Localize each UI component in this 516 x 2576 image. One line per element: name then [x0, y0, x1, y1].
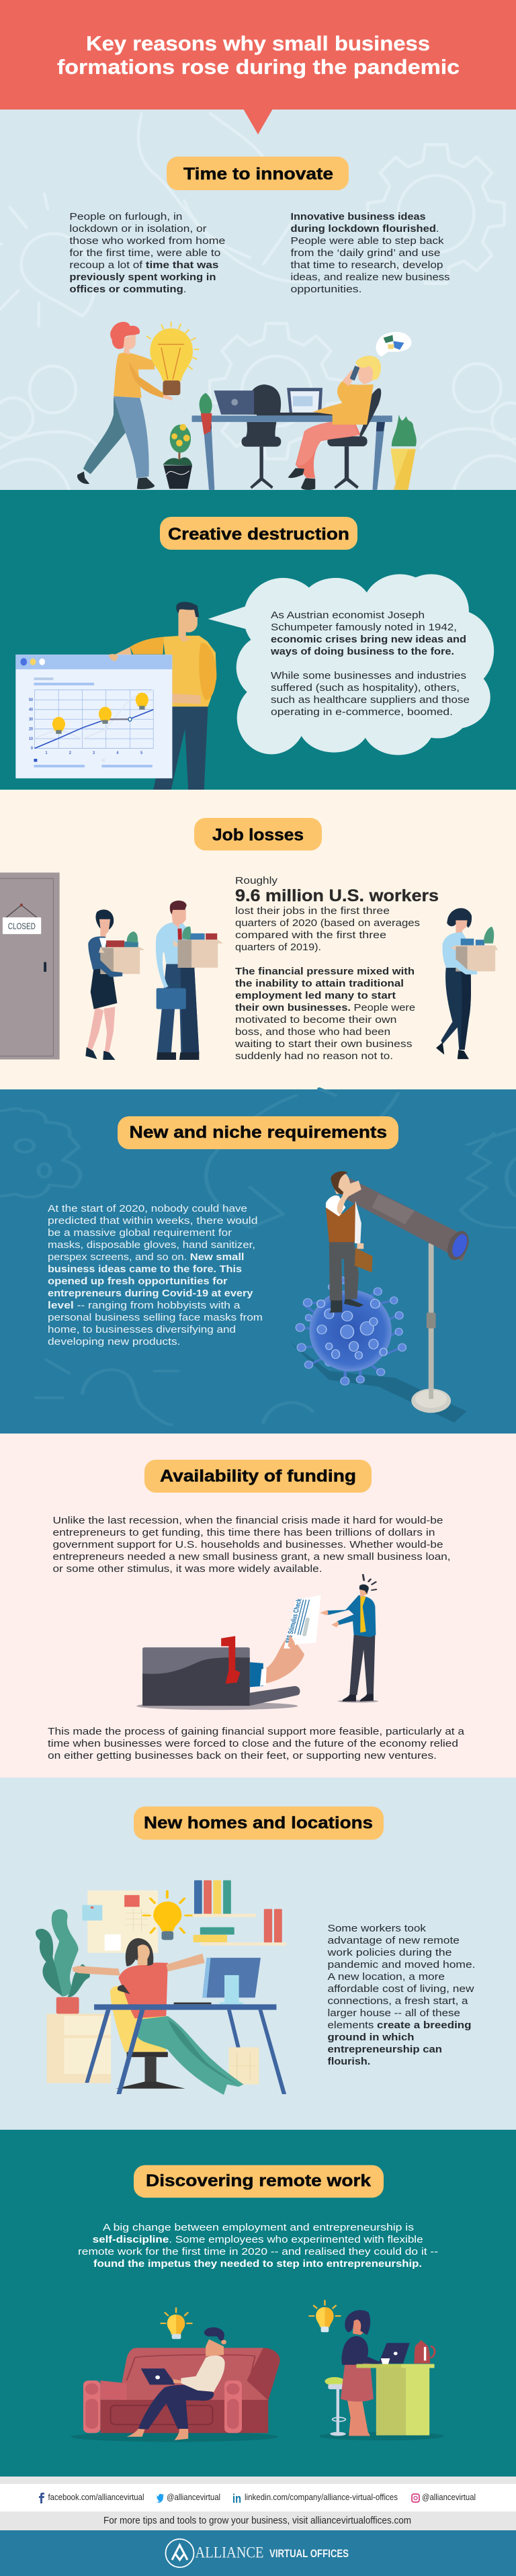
text block: job losses copy: motivated to become their own — [235, 1014, 396, 1026]
text block: job losses copy: quarters of 2019). — [235, 942, 321, 953]
text block: speech: Schumpeter famously noted in 1942, — [271, 622, 457, 633]
text block: speech: operating in e-commerce, boomed. — [271, 706, 453, 718]
text block: job losses copy: suddenly had no reason not to. — [235, 1050, 393, 1062]
text block: right column: that time to research, develop — [290, 259, 443, 271]
heading: availability of funding: Availability of funding — [160, 1466, 356, 1485]
heading: new homes and locations: New homes and locations — [144, 1814, 373, 1833]
text block: job losses copy: quarters of 2020 (based on averages — [235, 917, 420, 929]
chart board: line chart with lightbulbs: 50 — [29, 698, 33, 702]
text block: left column: offices or commuting . — [69, 284, 186, 295]
heading: discovering remote work — [134, 2165, 384, 2198]
text block: niche requirements: predicted that within weeks, there would — [48, 1215, 258, 1227]
heading: time to innovate — [167, 157, 349, 190]
text block: niche requirements: entrepreneurs during Covid-19 at every — [48, 1288, 253, 1299]
text block: left column: lockdown or in isolation, or — [69, 223, 206, 235]
illustration: man on sofa with laptop — [71, 2307, 280, 2442]
text block: speech: As Austrian economist Joseph — [271, 610, 425, 621]
text block: niche requirements: masks, disposable gloves, hand sanitizer, — [48, 1239, 255, 1251]
icon: twitter — [157, 2494, 164, 2503]
panel: time to innovate — [0, 109, 516, 490]
icon: instagram — [412, 2494, 419, 2502]
big stat: 9.6 million U.S. workers — [235, 886, 439, 905]
text block: right column — [290, 211, 450, 295]
text block: funding outcome: This made the process of gaining financial support more feasible, particularly at a — [48, 1726, 465, 1737]
text block: job losses copy: The financial pressure mixed with — [235, 966, 415, 977]
social links bar: facebook.com/alliancevirtual — [48, 2493, 144, 2502]
chart board: line chart with lightbulbs: 4 — [116, 751, 119, 755]
text block: new homes copy: Some workers took — [328, 1923, 427, 1934]
heading: time to innovate: Time to innovate — [183, 165, 333, 183]
illustration: woman at counter with laptop — [308, 2300, 444, 2440]
social links bar: @alliancevirtual — [422, 2493, 476, 2502]
text block: remote work: found the impetus they needed to step into entrepreneurship. — [93, 2258, 422, 2270]
text block: job losses copy: employment led many to start — [235, 990, 396, 1001]
illustration: mailbox with stimulus check — [136, 1575, 378, 1710]
illustration: woman walking with box — [436, 908, 498, 1059]
text block: niche requirements: personal business selling face masks from — [48, 1312, 263, 1323]
illustration: woman with box — [85, 909, 145, 1060]
illustration: mailbox with stimulus check: $$$ Stimulus Check — [284, 1597, 303, 1643]
text block: right column: during lockdown flourished . — [290, 223, 439, 235]
text block: remote work: self-discipline . Some employees who experimented with flexible — [93, 2234, 423, 2245]
panel: discovering remote work — [0, 2130, 516, 2477]
text block: new homes copy: larger house -- all of these — [328, 2007, 460, 2019]
chart board: line chart with lightbulbs — [16, 654, 172, 778]
title — [57, 32, 460, 79]
text block: funding outcome: time when businesses were forced to close and the future of the economy relied — [48, 1738, 458, 1749]
title: Key reasons why small business — [86, 32, 430, 55]
chart board: line chart with lightbulbs: 0 — [31, 747, 33, 751]
text block: niche requirements: level -- ranging from hobbyists with a — [48, 1300, 241, 1311]
title: formations rose during the pandemic — [57, 55, 460, 79]
icon: alliance logo — [165, 2539, 194, 2567]
text block: new homes copy: connections, a fresh start, a — [328, 1995, 468, 2007]
text block: speech: such as healthcare suppliers and those — [271, 694, 470, 706]
text block: right column: opportunities. — [290, 284, 361, 295]
illustration: telescope and man — [326, 1171, 472, 1413]
text block: funding intro: Unlike the last recession, when the financial crisis made it hard for would-be — [52, 1515, 443, 1526]
illustration: virus — [290, 1277, 467, 1423]
text block: job losses copy: waiting to start their own business — [234, 1038, 413, 1050]
text block: job losses copy: the inability to attain traditional — [235, 978, 404, 989]
text block: new homes copy: affordable cost of living, new — [328, 1983, 474, 1995]
heading: creative destruction — [160, 517, 357, 550]
panel: footer — [0, 2477, 516, 2576]
text block: right column: from the ‘daily grind’ and use — [290, 247, 441, 259]
heading: job losses: Job losses — [212, 825, 304, 844]
text block: new homes copy: flourish. — [328, 2056, 370, 2067]
call to action bar: For more tips and tools to grow your business, visit alliancevirtualoffices.com — [103, 2516, 411, 2526]
text block: new homes copy: pandemic and moved home. — [328, 1959, 476, 1970]
chart board: line chart with lightbulbs: 20 — [29, 727, 33, 731]
text block: remote work — [78, 2222, 438, 2270]
text block: niche requirements: perspex screens, and so on. New small — [48, 1251, 244, 1263]
call to action bar — [0, 2511, 516, 2530]
text block: new homes copy: entrepreneurship can — [328, 2044, 442, 2055]
icon: linkedin: in — [232, 2492, 241, 2505]
illustration: potted plants — [163, 393, 417, 490]
text block: speech: While some businesses and industries — [271, 670, 466, 681]
text block: new homes copy: work policies during the — [327, 1947, 452, 1958]
pointer triangle — [243, 109, 273, 134]
text block: new homes copy: elements create a breeding — [328, 2020, 472, 2031]
illustration: man carrying lightbulb — [77, 322, 199, 489]
logo band: ALLIANCE — [195, 2544, 263, 2561]
panel: new homes and locations — [0, 1778, 516, 2130]
heading: availability of funding — [144, 1460, 372, 1493]
text block: left column: People on furlough, in — [69, 211, 182, 222]
text block: remote work: A big change between employment and entrepreneurship is — [103, 2222, 414, 2233]
text block: left column: previously spent working in — [69, 272, 216, 283]
heading: job losses — [194, 818, 322, 851]
text block: speech: economic crises bring new ideas and — [271, 634, 466, 645]
text block: niche requirements: home, to businesses diversifying and — [48, 1324, 236, 1335]
illustration: closed door — [0, 872, 60, 1059]
social links bar — [0, 2484, 516, 2511]
text block: funding intro: entrepreneurs needed a new small business grant, a new small business loan, — [52, 1551, 450, 1563]
text block: speech: ways of doing business to the fore. — [270, 646, 454, 657]
text block: speech: suffered (such as hospitality), others, — [271, 682, 460, 694]
chart board: line chart with lightbulbs: 40 — [29, 708, 33, 712]
panel: header — [0, 0, 516, 134]
logo band: VIRTUAL OFFICES — [269, 2547, 349, 2560]
social links bar: linkedin.com/company/alliance-virtual-offices — [245, 2493, 398, 2502]
text block: niche requirements: At the start of 2020, nobody could have — [48, 1203, 247, 1214]
text block: new homes copy: ground in which — [328, 2032, 414, 2043]
text block: niche requirements: developing new products. — [48, 1336, 180, 1347]
text block: funding intro: entrepreneurs to get funding, this time there has been trillions of dollars in — [52, 1527, 435, 1538]
chart board: line chart with lightbulbs: 30 — [29, 718, 33, 722]
illustration: woman stretching at desk — [36, 1880, 286, 2095]
heading: new homes and locations — [134, 1806, 384, 1840]
chart board: line chart with lightbulbs: 10 — [29, 737, 33, 741]
social links bar: @alliancevirtual — [167, 2493, 220, 2502]
chart board: line chart with lightbulbs: 5 — [140, 751, 143, 755]
text block: new homes copy: A new location, a more — [328, 1971, 445, 1983]
illustration: desk with woman on phone — [192, 332, 411, 490]
text block: left column: recoup a lot of time that was — [69, 259, 218, 271]
heading: creative destruction: Creative destruction — [168, 525, 349, 544]
panel: new and niche requirements — [0, 1089, 516, 1434]
icon: facebook — [39, 2493, 44, 2503]
text block: job losses copy: compared with the first three — [235, 929, 386, 941]
text block: niche requirements: opened up fresh opportunities for — [48, 1276, 228, 1287]
text block: job losses copy — [234, 875, 439, 1062]
illustration: man with box and briefcase — [156, 901, 223, 1060]
text block: niche requirements: business ideas came to the fore. This — [48, 1263, 242, 1275]
heading: discovering remote work: Discovering remote work — [146, 2171, 371, 2190]
text block: niche requirements — [48, 1203, 263, 1347]
text block: right column: People were able to step back — [290, 235, 444, 247]
chart board: line chart with lightbulbs: 1 — [46, 751, 48, 755]
text block: remote work: remote work for the first time in 2020 -- and realised they could do it -- — [78, 2246, 438, 2257]
text block: speech — [270, 610, 470, 718]
text block: job losses copy: boss, and those who had been — [235, 1026, 390, 1038]
text block: job losses copy: Roughly — [235, 875, 278, 886]
panel: job losses — [0, 790, 516, 1089]
speech bubble cloud — [208, 574, 494, 755]
text block: funding intro: government support for U.S. households and businesses. Whether would-be — [52, 1539, 443, 1550]
text block: funding intro — [52, 1515, 450, 1575]
illustration: presenter — [115, 601, 216, 790]
text block: job losses copy: lost their jobs in the first three — [235, 905, 390, 917]
text block: funding intro: or some other stimulus, it was more widely available. — [52, 1563, 322, 1575]
chart board: line chart with lightbulbs: 2 — [69, 751, 71, 755]
illustration: closed door: CLOSED — [8, 921, 36, 931]
logo band — [0, 2530, 516, 2576]
heading: new and niche requirements: New and niche requirements — [129, 1123, 387, 1142]
text block: right column: Innovative business ideas — [290, 211, 426, 222]
heading: new and niche requirements — [118, 1116, 398, 1149]
text block: funding outcome — [48, 1726, 465, 1761]
text block: right column: ideas, and realize new business — [290, 272, 450, 283]
text block: new homes copy: advantage of new remote — [328, 1935, 460, 1946]
text block: new homes copy — [327, 1923, 476, 2067]
text block: niche requirements: be a massive global requirement for — [48, 1227, 232, 1239]
text block: left column: for the first time, were able to — [69, 247, 220, 259]
text block: left column — [69, 211, 225, 295]
text block: left column: those who worked from home — [69, 235, 225, 247]
text block: funding outcome: on either getting businesses back on their feet, or supporting new ventures. — [48, 1750, 437, 1761]
chart board: line chart with lightbulbs: 3 — [93, 751, 95, 755]
panel: availability of funding — [0, 1434, 516, 1778]
panel: creative destruction — [0, 490, 516, 790]
text block: job losses copy: their own businesses. People were — [235, 1002, 415, 1013]
